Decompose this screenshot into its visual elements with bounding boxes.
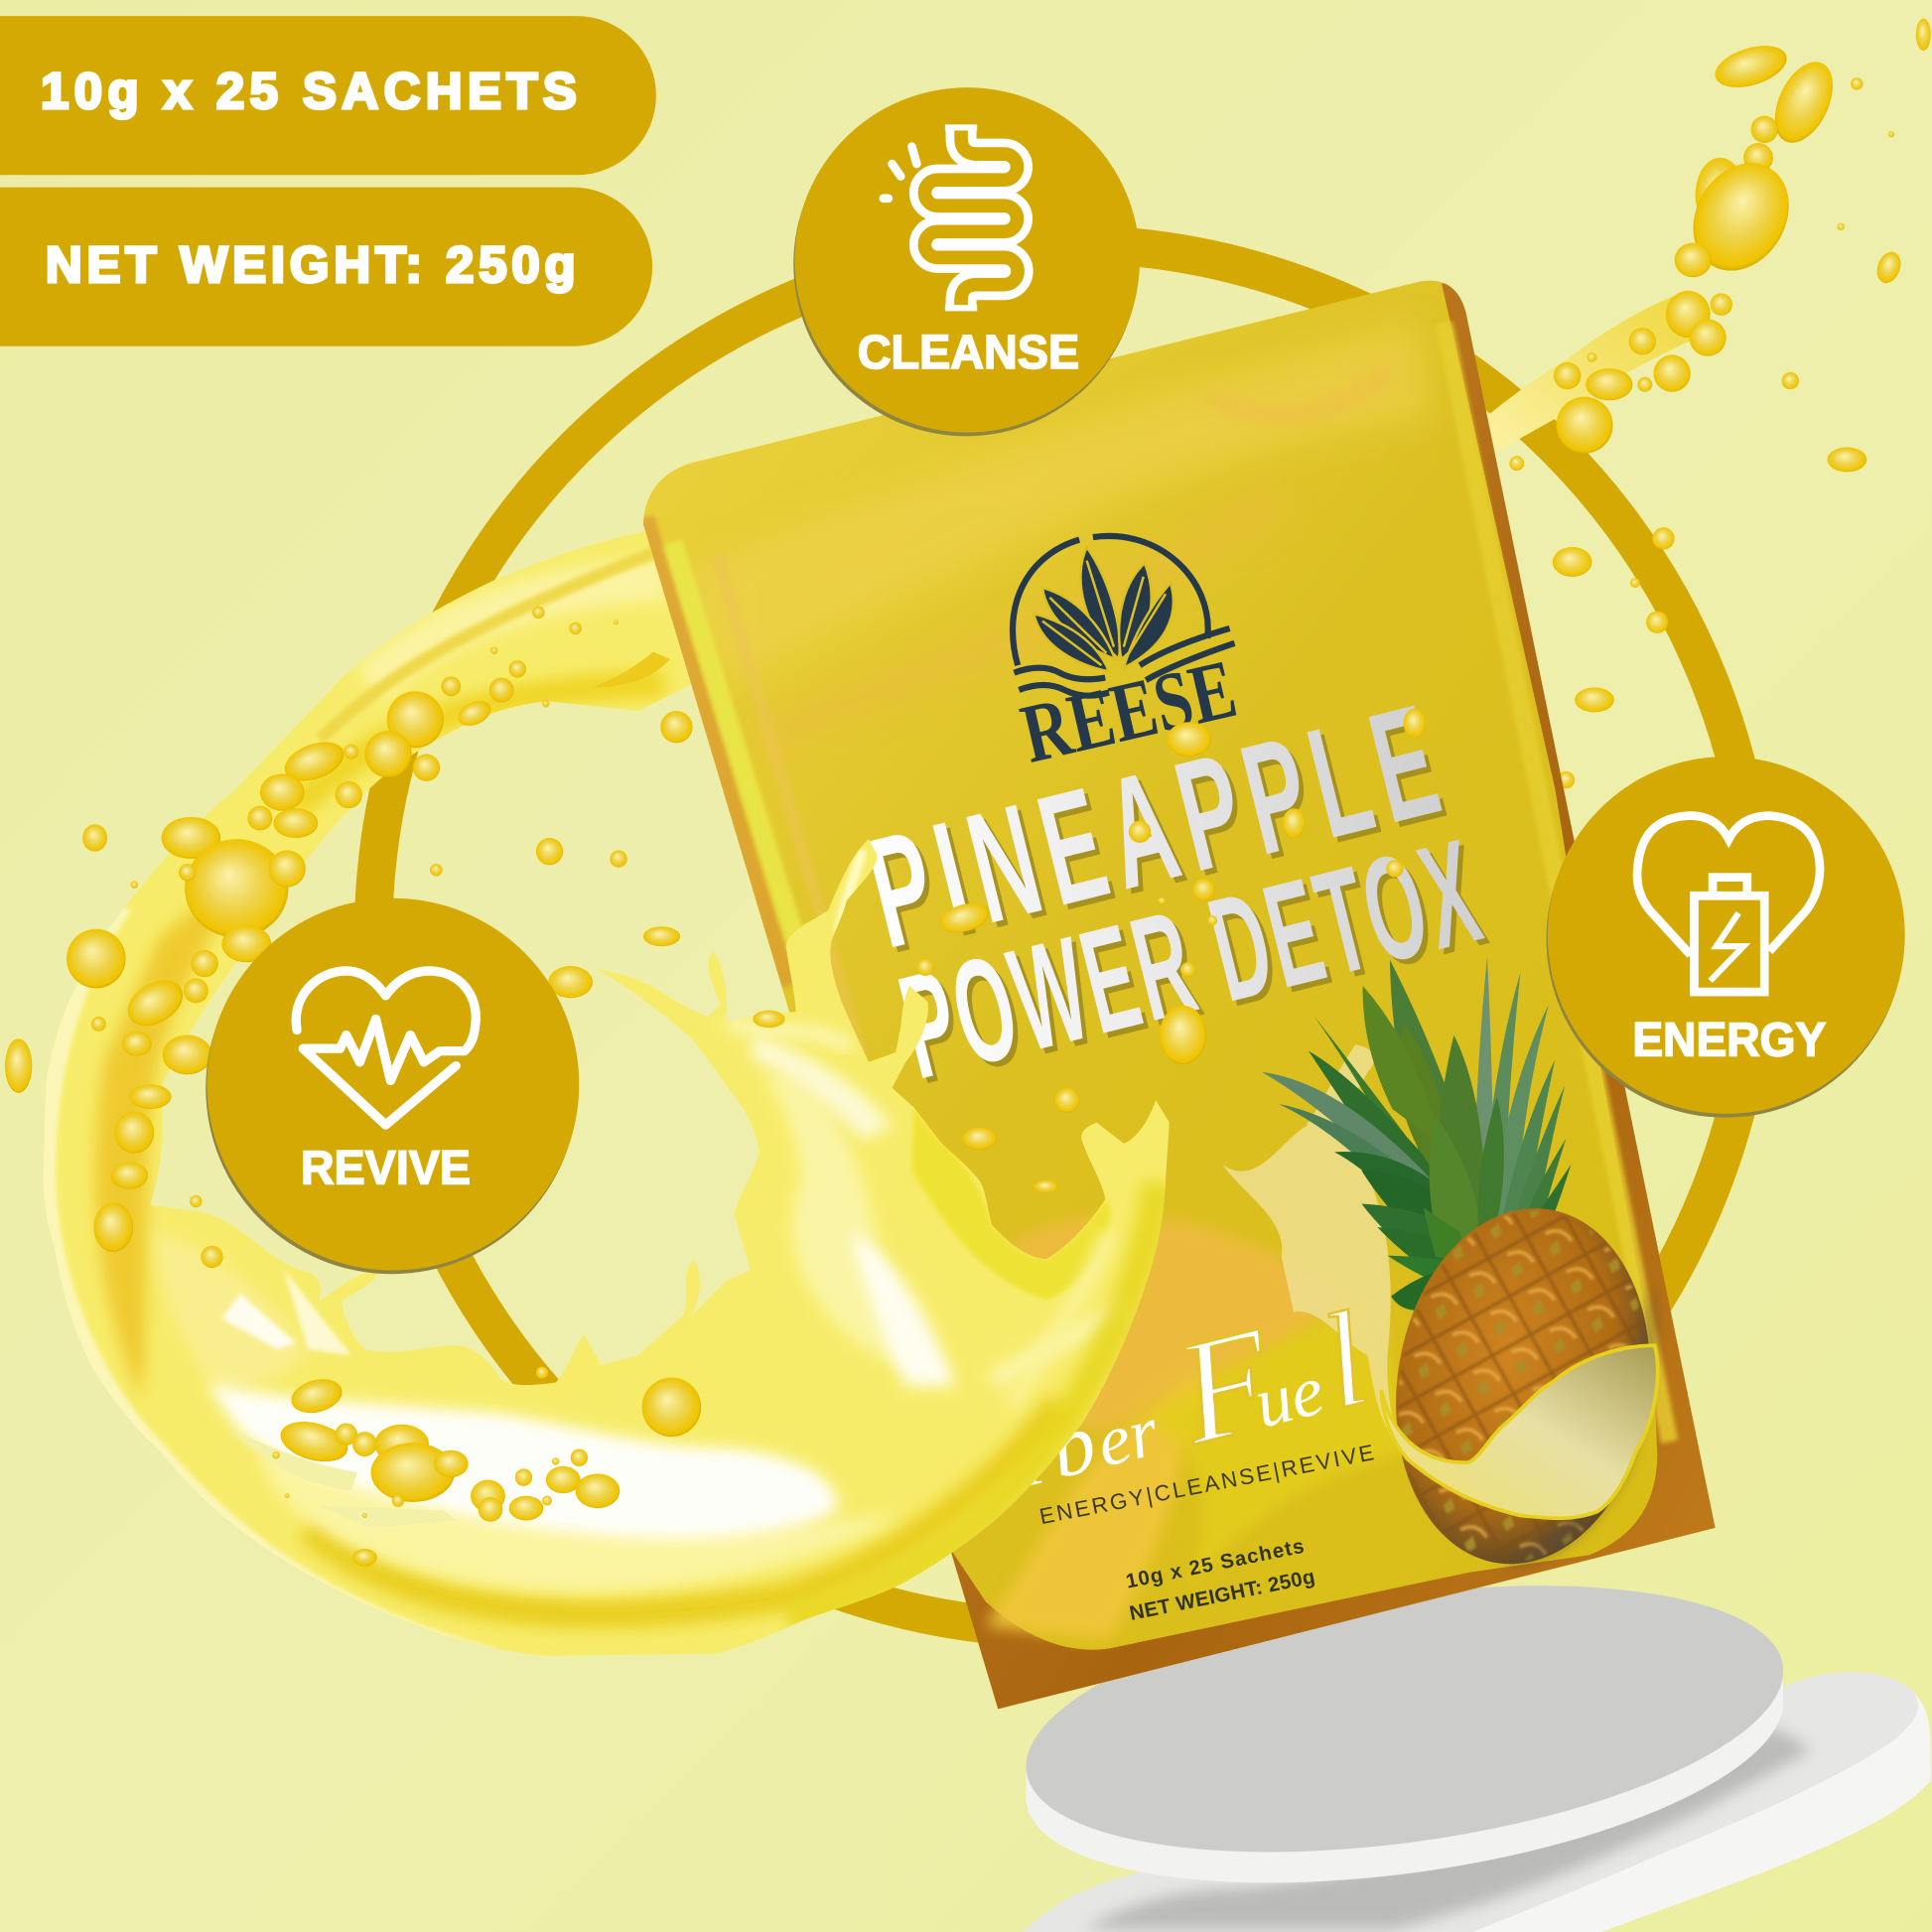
pouch: script tagline: b bbox=[1040, 1394, 1105, 1496]
pouch: script tagline: er bbox=[1089, 1391, 1167, 1482]
pill: net weight: NET WEIGHT: 250g bbox=[46, 236, 576, 293]
product pouch bbox=[643, 281, 1737, 1725]
pouch: script tagline: F bbox=[1162, 1295, 1292, 1476]
pouch: benefits line: ENERGY|CLEANSE|REVIVE bbox=[1037, 1440, 1376, 1529]
pouch: sachet count: 10g x 25 Sachets bbox=[1124, 1535, 1306, 1593]
pill: sachet count bbox=[0, 16, 656, 175]
badge: cleanse bbox=[793, 87, 1140, 436]
circular ring bbox=[373, 244, 1758, 1629]
pouch: brand logo bbox=[1013, 536, 1244, 781]
pouch: script tagline: ue bbox=[1247, 1349, 1331, 1443]
pouch: title POWER DETOX: POWER DETOX bbox=[891, 812, 1498, 1115]
pouch: title POWER DETOX: POWER DETOX bbox=[886, 807, 1493, 1110]
badge: cleanse: CLEANSE bbox=[858, 326, 1079, 379]
juice splash swirl bbox=[5, 531, 1170, 1657]
upper white pedestal disc bbox=[1010, 1544, 1800, 1925]
splash: golden droplet clusters bbox=[5, 607, 785, 1566]
icon: intestine bbox=[884, 123, 1018, 316]
pouch: brown side and bottom band bbox=[936, 283, 1737, 1725]
pill: sachet count: 10g x 25 SACHETS bbox=[41, 63, 577, 119]
pouch: script tagline: l bbox=[1308, 1282, 1381, 1438]
splash: main body bbox=[43, 531, 1170, 1656]
pouch: title PINEAPPLE: PINEAPPLE bbox=[858, 677, 1458, 987]
pineapple illustration bbox=[1262, 956, 1672, 1581]
pouch: brand logo: REESE bbox=[1014, 642, 1244, 781]
pouch: script tagline: F bbox=[945, 1374, 1053, 1526]
pouch: script tagline: i bbox=[1011, 1419, 1050, 1503]
pouch: marble swirl tones bbox=[645, 321, 1670, 1639]
icon: heart with pulse bbox=[296, 971, 476, 1125]
droplets over the pouch bbox=[916, 709, 1426, 1192]
badge: energy: ENERGY bbox=[1632, 1014, 1826, 1067]
icon: heart with battery bbox=[1637, 816, 1820, 992]
pouch: title PINEAPPLE: PINEAPPLE bbox=[853, 672, 1453, 982]
splash: depth shading and highlights bbox=[47, 548, 1159, 1657]
lower white pedestal disc bbox=[1023, 1672, 1931, 1932]
badge: energy bbox=[1547, 757, 1905, 1118]
pill: net weight bbox=[0, 188, 652, 346]
right juice stream with droplets bbox=[1476, 19, 1931, 788]
badge: revive: REVIVE bbox=[301, 1142, 471, 1195]
pouch: net weight: NET WEIGHT: 250g bbox=[1128, 1566, 1316, 1625]
badge: revive bbox=[206, 898, 579, 1274]
pouch: translucent splash printed on pack bbox=[1222, 1044, 1392, 1434]
